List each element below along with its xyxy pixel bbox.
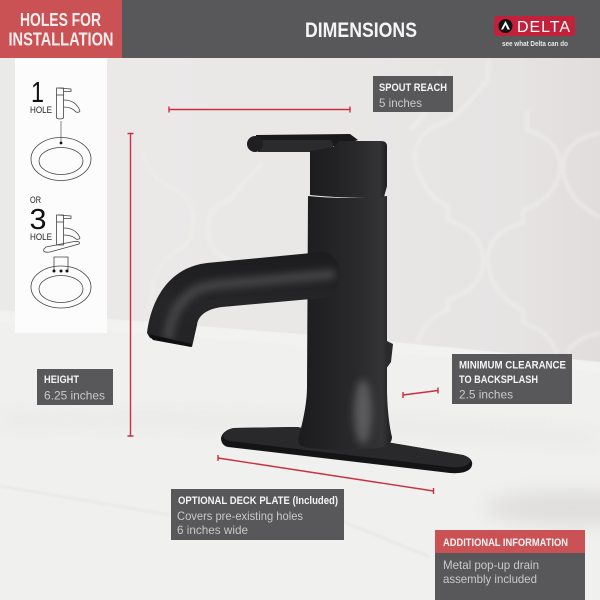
icon: faucet with deck plate xyxy=(44,215,80,252)
1 hole option xyxy=(30,77,91,180)
pop-up drain lever xyxy=(385,340,393,369)
1 hole option: HOLE xyxy=(30,105,52,115)
title: holes for installation xyxy=(0,0,122,58)
3 hole option: 3 xyxy=(30,204,46,236)
callout: spout reach: SPOUT REACH xyxy=(379,82,447,94)
logo: Delta xyxy=(494,16,575,48)
deck plate xyxy=(221,427,472,473)
header bar xyxy=(0,0,600,58)
arrow: clearance dimension line xyxy=(403,388,438,398)
icon: faucet outline xyxy=(56,88,80,119)
title: dimensions: DIMENSIONS xyxy=(305,19,417,42)
arrow: height dimension line xyxy=(128,133,134,436)
arrow: spout reach dimension line xyxy=(169,106,350,112)
callout: height: HEIGHT xyxy=(44,374,79,386)
icon: sink with three holes xyxy=(31,257,91,308)
callout: spout reach xyxy=(373,76,453,112)
1 hole option: 1 xyxy=(31,77,44,109)
panel: additional information: ADDITIONAL INFORMATION xyxy=(443,537,568,549)
spout xyxy=(147,252,340,347)
3 hole option xyxy=(30,195,91,308)
callout: optional deck plate: Covers pre-existing holes xyxy=(177,509,303,523)
title: holes for installation: INSTALLATION xyxy=(8,30,114,50)
panel: additional information: Metal pop-up drain xyxy=(443,558,539,572)
callout: height: 6.25 inches xyxy=(44,388,105,402)
callout: optional deck plate xyxy=(171,489,344,540)
callout: minimum clearance: TO BACKSPLASH xyxy=(459,374,538,386)
callout: minimum clearance: MINIMUM CLEARANCE xyxy=(459,360,566,372)
panel: additional information xyxy=(435,530,585,600)
logo: Delta: DELTA xyxy=(517,19,570,36)
callout: optional deck plate: 6 inches wide xyxy=(177,523,248,537)
title: holes for installation: HOLES FOR xyxy=(20,10,101,30)
faucet with deck plate xyxy=(147,134,472,473)
callout: minimum clearance xyxy=(452,354,572,404)
handle cap xyxy=(310,141,387,198)
callout: height xyxy=(37,369,113,405)
faucet body xyxy=(298,196,392,450)
callout: minimum clearance: 2.5 inches xyxy=(459,388,513,402)
icon: sink with one hole xyxy=(31,138,91,180)
aerator xyxy=(148,334,192,347)
arrow: deck plate dimension line xyxy=(218,455,434,494)
3 hole option: OR xyxy=(30,195,41,205)
panel: additional information: assembly included xyxy=(443,572,537,586)
callout: optional deck plate: OPTIONAL DECK PLATE (Included) xyxy=(178,495,338,507)
panel: holes for installation diagrams xyxy=(15,58,107,333)
handle lever xyxy=(247,134,358,152)
3 hole option: HOLE xyxy=(30,232,52,242)
logo: Delta: see what Delta can do xyxy=(502,41,568,48)
callout: spout reach: 5 inches xyxy=(379,96,422,110)
